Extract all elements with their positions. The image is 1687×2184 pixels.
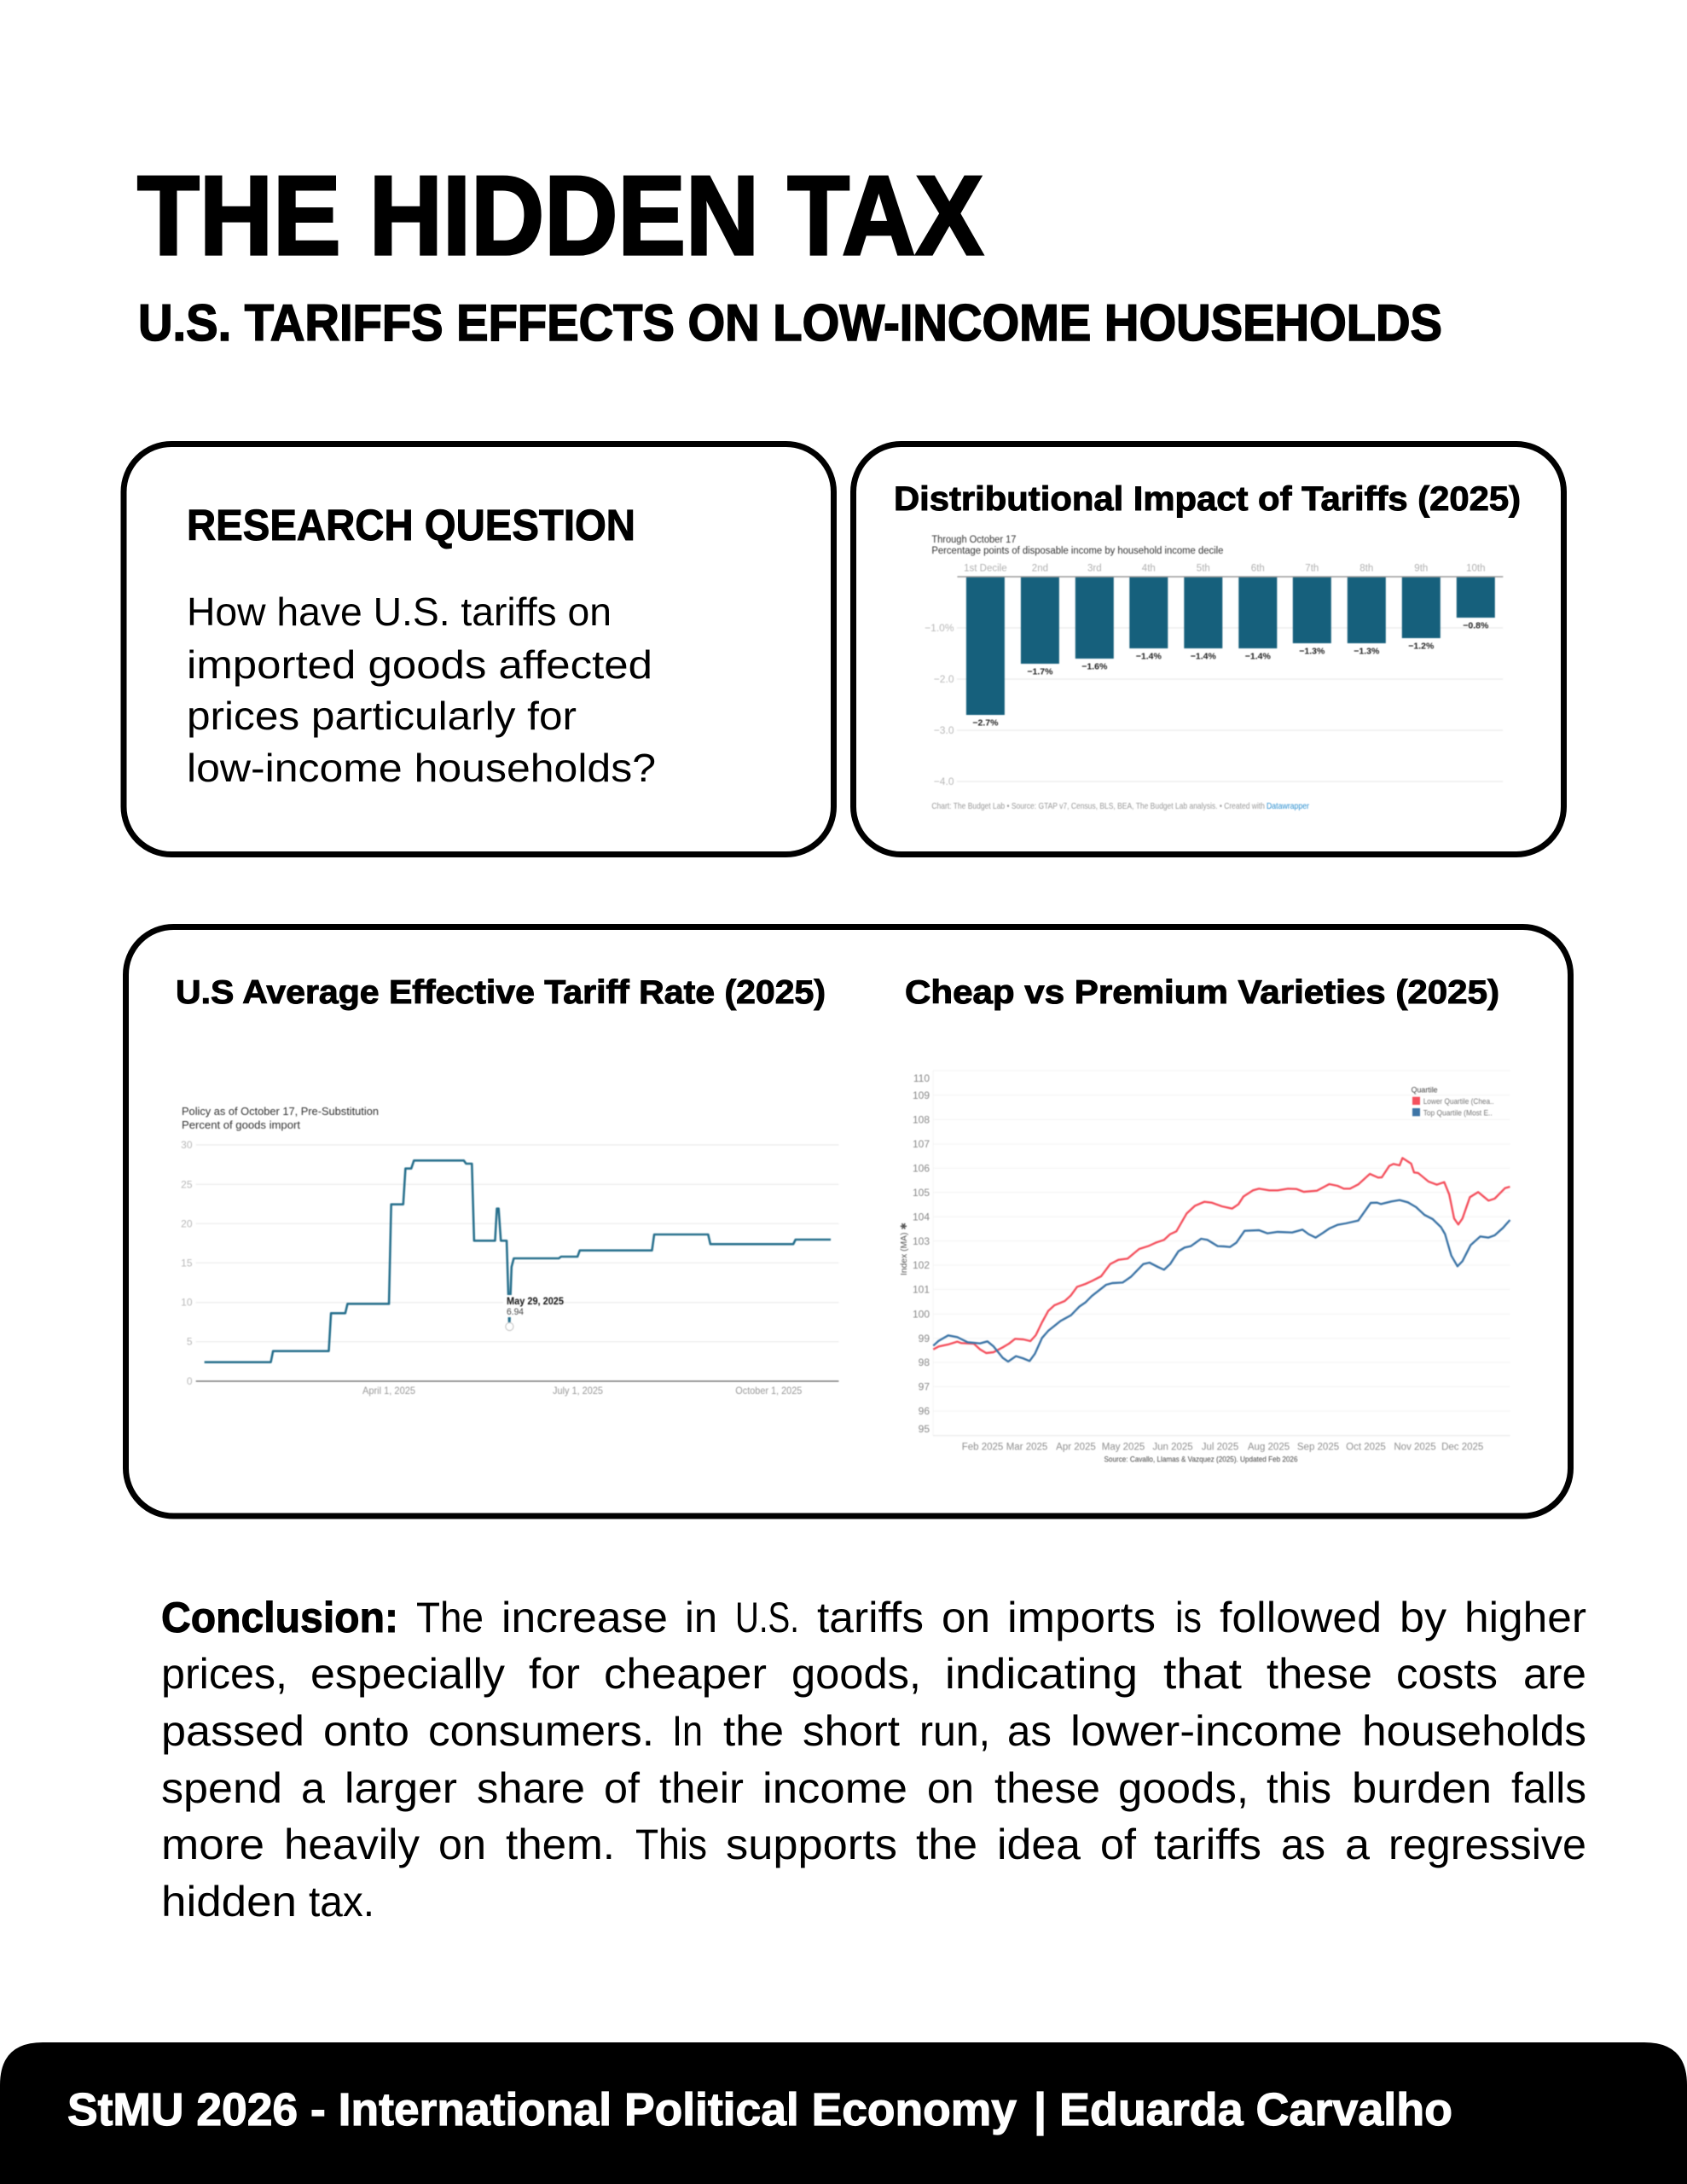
- bar chart: tariff impact by income decile: Chart: The Budget Lab • Source: GTAP v7, Census, BLS, BEA, The Budget Lab analysis. • Created with: [931, 801, 1265, 811]
- heading: cheap vs premium: Cheap vs Premium Varieties (2025): [905, 974, 1499, 1011]
- conclusion text: tax.: [309, 1878, 374, 1926]
- conclusion text: higher: [1464, 1594, 1586, 1641]
- conclusion text: consumers.: [428, 1707, 654, 1755]
- conclusion text: these: [994, 1764, 1100, 1812]
- conclusion text: by: [1400, 1594, 1446, 1641]
- conclusion text: more: [161, 1821, 264, 1868]
- bar chart: tariff impact by income decile: 4th: [1142, 563, 1156, 573]
- conclusion text: is: [1175, 1594, 1202, 1641]
- conclusion text: prices,: [161, 1650, 287, 1698]
- line chart: cheap vs premium varieties: Mar 2025: [1006, 1442, 1047, 1452]
- line chart: cheap vs premium varieties: 98: [919, 1356, 930, 1368]
- line chart: cheap vs premium varieties: [900, 1071, 1510, 1465]
- conclusion text: Conclusion:: [161, 1594, 398, 1641]
- conclusion text: indicating: [945, 1650, 1138, 1698]
- line chart: cheap vs premium varieties: 100: [913, 1309, 930, 1321]
- conclusion text: supports: [726, 1821, 897, 1868]
- conclusion text: of: [1100, 1821, 1136, 1868]
- line chart: cheap vs premium varieties: Top Quartile (Most E..: [1423, 1108, 1493, 1118]
- conclusion text: lower-income: [1070, 1707, 1342, 1755]
- conclusion text: falls: [1511, 1764, 1586, 1812]
- line chart: cheap vs premium varieties: 109: [913, 1089, 930, 1101]
- conclusion text: run,: [919, 1707, 990, 1755]
- bar chart: tariff impact by income decile: −1.4%: [1245, 652, 1271, 662]
- conclusion text: idea: [997, 1821, 1081, 1868]
- conclusion text: goods,: [1118, 1764, 1249, 1812]
- line chart: cheap vs premium varieties: 95: [919, 1423, 930, 1435]
- conclusion text: costs: [1396, 1650, 1498, 1698]
- bar chart: tariff impact by income decile: −1.3%: [1299, 647, 1325, 657]
- line chart: cheap vs premium varieties: Index (MA) ✱: [900, 1223, 909, 1275]
- conclusion text: the: [916, 1821, 977, 1868]
- conclusion text: a: [301, 1764, 325, 1812]
- bar chart: tariff impact by income decile: 3rd: [1087, 563, 1102, 573]
- conclusion text: a: [1345, 1821, 1370, 1868]
- research question text: [187, 590, 656, 790]
- conclusion text: that: [1163, 1650, 1242, 1698]
- line chart: effective tariff rate: May 29, 2025: [507, 1297, 565, 1307]
- line chart: cheap vs premium varieties: 103: [913, 1235, 930, 1247]
- bar chart: tariff impact by income decile: Datawrapper: [1267, 801, 1309, 811]
- conclusion text: on: [438, 1821, 486, 1868]
- heading: distributional impact: Distributional Impact of Tariffs (2025): [894, 480, 1521, 518]
- conclusion text: income: [762, 1764, 907, 1812]
- conclusion text: passed: [161, 1707, 304, 1755]
- bar chart: tariff impact by income decile: −1.6%: [1081, 662, 1108, 672]
- conclusion text: hidden: [161, 1878, 297, 1926]
- subtitle: U.S. TARIFFS EFFECTS ON LOW-INCOME HOUSEHOLDS: [138, 294, 1442, 351]
- bar chart: tariff impact by income decile: −4.0: [934, 775, 954, 787]
- conclusion text: these: [1267, 1650, 1372, 1698]
- conclusion text: for: [529, 1650, 580, 1698]
- line chart: cheap vs premium varieties: 110: [913, 1072, 930, 1084]
- bar chart: tariff impact by income decile: 5th: [1197, 563, 1210, 573]
- conclusion text: as: [1007, 1707, 1052, 1755]
- line chart: cheap vs premium varieties: May 2025: [1102, 1442, 1145, 1452]
- conclusion text: in: [685, 1594, 717, 1641]
- line chart: cheap vs premium varieties: 107: [913, 1138, 930, 1150]
- bar chart: tariff impact by income decile: [925, 535, 1503, 811]
- bar chart: tariff impact by income decile: −2.0: [934, 673, 954, 685]
- conclusion text: spend: [161, 1764, 282, 1812]
- conclusion text: households: [1362, 1707, 1586, 1755]
- line chart: cheap vs premium varieties: 105: [913, 1187, 930, 1199]
- bar chart: tariff impact by income decile: −0.8%: [1463, 621, 1489, 631]
- conclusion text: onto: [323, 1707, 409, 1755]
- line chart: effective tariff rate: 30: [181, 1139, 193, 1151]
- panel: tariff rate and price varieties: [126, 926, 1571, 1516]
- line chart: effective tariff rate: 0: [187, 1375, 193, 1387]
- line chart: effective tariff rate: 6.94: [507, 1307, 524, 1317]
- conclusion text: This: [635, 1821, 707, 1868]
- bar chart: tariff impact by income decile: −1.2%: [1408, 642, 1435, 652]
- conclusion text: [161, 1594, 1586, 1926]
- line chart: effective tariff rate: Percent of goods import: [182, 1119, 301, 1131]
- line chart: cheap vs premium varieties: Jul 2025: [1202, 1442, 1238, 1452]
- bar chart: tariff impact by income decile: 8th: [1359, 563, 1373, 573]
- line chart: effective tariff rate: [181, 1106, 838, 1397]
- line chart: effective tariff rate: 25: [181, 1178, 193, 1190]
- research question text: How have U.S. tariffs on: [187, 590, 612, 634]
- conclusion text: their: [659, 1764, 744, 1812]
- footer bar: [0, 2042, 1687, 2184]
- conclusion text: as: [1281, 1821, 1325, 1868]
- bar chart: tariff impact by income decile: 1st Decile: [964, 563, 1007, 573]
- line chart: cheap vs premium varieties: 102: [913, 1259, 930, 1271]
- conclusion text: larger: [345, 1764, 457, 1812]
- panel: distributional impact: [853, 444, 1564, 855]
- line chart: cheap vs premium varieties: Oct 2025: [1346, 1442, 1386, 1452]
- panel: research question: [124, 444, 834, 855]
- conclusion text: imports: [1007, 1594, 1156, 1641]
- conclusion text: of: [604, 1764, 640, 1812]
- line chart: cheap vs premium varieties: Quartile: [1412, 1086, 1438, 1095]
- conclusion text: regressive: [1388, 1821, 1586, 1868]
- line chart: cheap vs premium varieties: 108: [913, 1114, 930, 1126]
- heading: effective tariff rate: U.S Average Effective Tariff Rate (2025): [176, 974, 826, 1011]
- bar chart: tariff impact by income decile: 10th: [1466, 563, 1485, 573]
- line chart: cheap vs premium varieties: 97: [919, 1380, 930, 1392]
- conclusion text: short: [803, 1707, 900, 1755]
- research question text: prices particularly for: [187, 694, 577, 738]
- conclusion text: this: [1267, 1764, 1331, 1812]
- conclusion text: on: [927, 1764, 974, 1812]
- conclusion text: tariffs: [817, 1594, 924, 1641]
- line chart: cheap vs premium varieties: Lower Quartile (Chea..: [1423, 1097, 1494, 1107]
- line chart: effective tariff rate: 5: [187, 1336, 193, 1348]
- conclusion text: The: [416, 1594, 484, 1641]
- bar chart: tariff impact by income decile: Through October 17: [931, 535, 1016, 545]
- line chart: cheap vs premium varieties: 99: [919, 1333, 930, 1345]
- bar chart: tariff impact by income decile: 6th: [1251, 563, 1265, 573]
- conclusion text: burden: [1352, 1764, 1492, 1812]
- line chart: effective tariff rate: July 1, 2025: [553, 1385, 603, 1397]
- conclusion text: cheaper: [604, 1650, 767, 1698]
- bar chart: tariff impact by income decile: −1.7%: [1027, 667, 1053, 677]
- title: THE HIDDEN TAX: [137, 153, 983, 278]
- line chart: cheap vs premium varieties: 96: [919, 1405, 930, 1417]
- bar chart: tariff impact by income decile: Percentage points of disposable income by household income decile: [931, 546, 1223, 556]
- conclusion text: In: [672, 1707, 703, 1755]
- bar chart: tariff impact by income decile: −1.4%: [1191, 652, 1216, 662]
- line chart: cheap vs premium varieties: 104: [913, 1211, 930, 1223]
- line chart: effective tariff rate: Policy as of October 17, Pre-Substitution: [182, 1106, 379, 1118]
- conclusion text: tariffs: [1154, 1821, 1261, 1868]
- line chart: cheap vs premium varieties: Nov 2025: [1394, 1442, 1436, 1452]
- line chart: effective tariff rate: 15: [181, 1257, 193, 1269]
- line chart: cheap vs premium varieties: Sep 2025: [1297, 1442, 1339, 1452]
- conclusion text: the: [723, 1707, 784, 1755]
- bar chart: tariff impact by income decile: −1.0%: [925, 622, 954, 634]
- line chart: cheap vs premium varieties: 106: [913, 1162, 930, 1174]
- line chart: cheap vs premium varieties: Feb 2025: [962, 1442, 1003, 1452]
- conclusion text: heavily: [284, 1821, 420, 1868]
- line chart: cheap vs premium varieties: Source: Cavallo, Llamas & Vazquez (2025). Updated Feb 2026: [1104, 1455, 1298, 1465]
- bar chart: tariff impact by income decile: −1.4%: [1136, 652, 1162, 662]
- conclusion text: especially: [310, 1650, 505, 1698]
- bar chart: tariff impact by income decile: 9th: [1414, 563, 1428, 573]
- bar chart: tariff impact by income decile: 7th: [1305, 563, 1319, 573]
- line chart: cheap vs premium varieties: 101: [913, 1283, 930, 1295]
- conclusion text: goods,: [791, 1650, 921, 1698]
- research question text: imported goods affected: [187, 642, 652, 687]
- conclusion text: share: [477, 1764, 585, 1812]
- bar chart: tariff impact by income decile: 2nd: [1032, 563, 1048, 573]
- conclusion text: are: [1523, 1650, 1586, 1698]
- bar chart: tariff impact by income decile: −2.7%: [972, 718, 999, 729]
- research question text: low-income households?: [187, 746, 656, 790]
- conclusion text: them.: [506, 1821, 615, 1868]
- bar chart: tariff impact by income decile: −1.3%: [1354, 647, 1380, 657]
- line chart: cheap vs premium varieties: Jun 2025: [1152, 1442, 1193, 1452]
- conclusion text: on: [942, 1594, 990, 1641]
- line chart: effective tariff rate: October 1, 2025: [735, 1385, 803, 1397]
- line chart: effective tariff rate: 10: [181, 1297, 193, 1309]
- line chart: cheap vs premium varieties: Aug 2025: [1248, 1442, 1290, 1452]
- conclusion text: followed: [1220, 1594, 1382, 1641]
- conclusion text: U.S.: [735, 1594, 799, 1641]
- footer text: StMU 2026 - International Political Economy: [67, 2084, 1017, 2135]
- line chart: cheap vs premium varieties: Dec 2025: [1441, 1442, 1483, 1452]
- bar chart: tariff impact by income decile: −3.0: [934, 724, 954, 736]
- line chart: effective tariff rate: 20: [181, 1217, 193, 1229]
- footer author: | Eduarda Carvalho: [1034, 2084, 1452, 2136]
- conclusion text: increase: [501, 1594, 668, 1641]
- line chart: cheap vs premium varieties: Apr 2025: [1056, 1442, 1096, 1452]
- research question heading: RESEARCH QUESTION: [187, 501, 635, 549]
- line chart: effective tariff rate: April 1, 2025: [362, 1385, 415, 1397]
